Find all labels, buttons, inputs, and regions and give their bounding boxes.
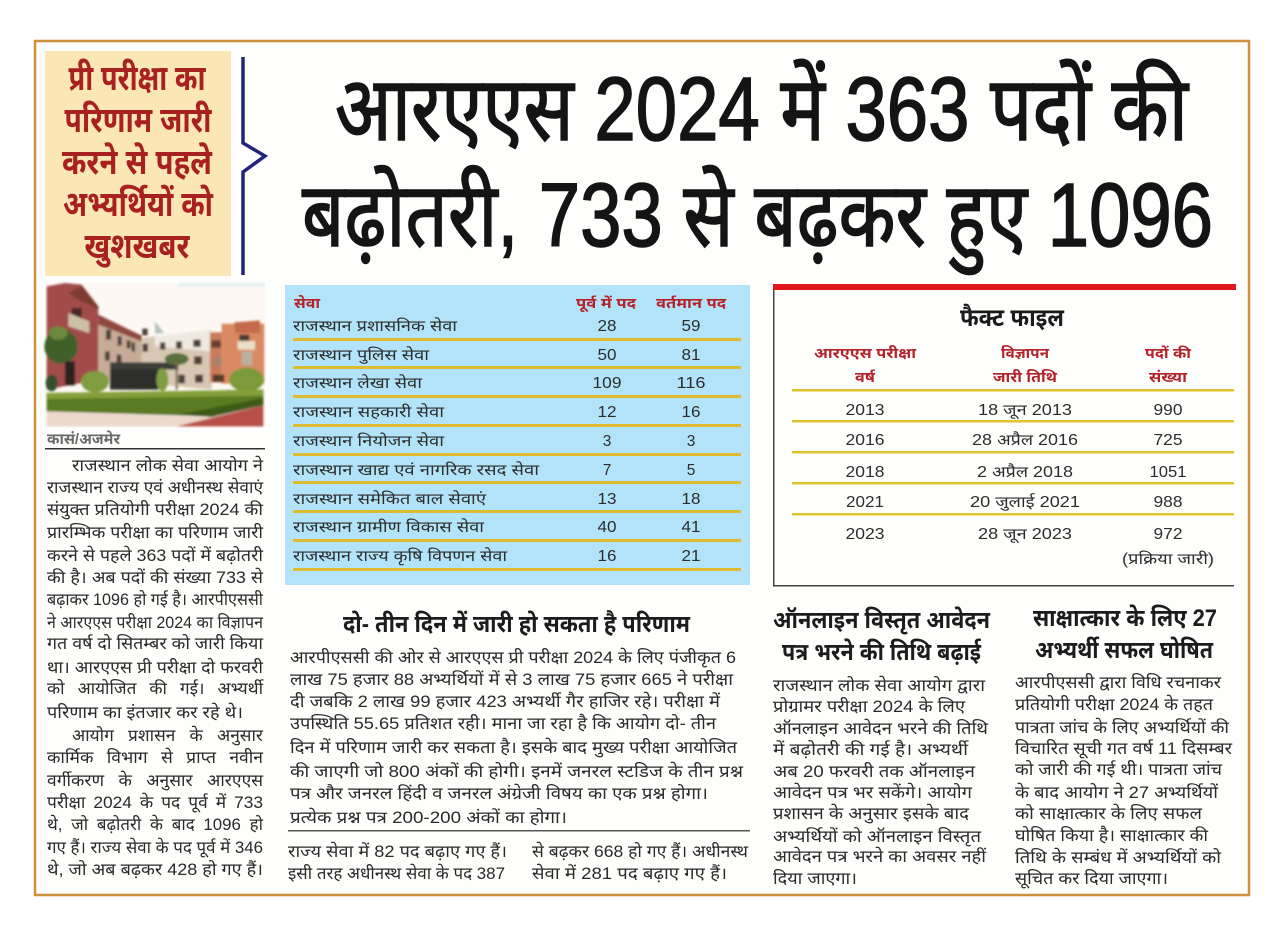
table rows: 40: [598, 519, 617, 536]
callout: pre exam tag: परिणाम जारी: [64, 100, 212, 140]
text block: centre article: लाख 75 हजार 88 अभ्यर्थियों में से 3 लाख 75 हजार 665 ने परीक्षा: [290, 670, 734, 689]
table rows: 81: [682, 347, 700, 364]
table header: सेवा: [294, 294, 321, 311]
text block: interview: को जारी की गई थी। पात्रता जांच: [1015, 760, 1223, 779]
table rows: 12: [598, 404, 616, 421]
table rows: 41: [682, 519, 700, 536]
table rows: 5: [687, 462, 695, 479]
table rows: 13: [598, 491, 616, 508]
text block: centre article: पत्र और जनरल हिंदी व जनरल अंग्रेजी विषय का एक प्रश्न होगा।: [290, 784, 708, 803]
text block: interview: के बाद आयोग ने 27 अभ्यर्थियों: [1015, 783, 1219, 802]
callout: pre exam tag: खुशखबर: [84, 227, 190, 268]
byline: कासं/अजमेर: [47, 430, 120, 448]
table rows: राजस्थान ग्रामीण विकास सेवा: [293, 517, 485, 536]
text block: left column: करने से पहले 363 पदों में बढ़ोतरी: [47, 546, 264, 565]
arrow: navy bracket: [243, 57, 265, 275]
fact file rows: 2021: [846, 494, 884, 511]
fact file rows: 20 जुलाई 2021: [970, 493, 1080, 512]
text block: left column: थे, जो बढ़ोतरी के बाद 1096 हो: [47, 815, 264, 834]
text block: left column: प्रारम्भिक परीक्षा का परिणाम जारी: [47, 524, 264, 542]
callout: pre exam tag: अभ्यर्थियों को: [63, 184, 214, 224]
table rows: [293, 316, 706, 566]
text block: left column: थे, जो अब बढ़कर 428 हो गए हैं।: [47, 860, 263, 879]
heading: online application: [773, 606, 991, 666]
fact file rows: 18 जून 2013: [978, 402, 1072, 420]
table rows: 18: [682, 491, 700, 508]
text block: online application: प्रशासन के अनुसार इसके बाद: [773, 804, 969, 824]
fact file rows: 2 अप्रैल 2018: [977, 462, 1073, 481]
text block: online application: में बढ़ोतरी की गई है। अभ्यर्थी: [773, 740, 969, 759]
text block: centre article footer: [288, 842, 748, 883]
fact file column headers: विज्ञापन: [1001, 345, 1049, 361]
fact file rows: 28 जून 2023: [978, 526, 1072, 544]
table rows: राजस्थान खाद्य एवं नागरिक रसद सेवा: [293, 460, 540, 479]
fact file column headers: जारी तिथि: [993, 369, 1058, 385]
text block: left column: बढ़ाकर 1096 हो गई है। आरपीएससी: [47, 590, 264, 609]
text block: online application: दिया जाएगा।: [773, 870, 857, 888]
text block: centre article: उपस्थिति 55.65 प्रतिशत रही। माना जा रहा है कि आयोग दो- तीन: [290, 714, 717, 733]
text block: centre article: की जाएगी जो 800 अंकों की होगी। इनमें जनरल स्टडिज के तीन प्रश्न: [290, 762, 743, 781]
text block: centre article: प्रत्येक प्रश्न पत्र 200-200 अंकों का होगा।: [290, 808, 567, 827]
text block: interview: [1015, 674, 1232, 889]
text block: interview: विचारित सूची गत वर्ष 11 दिसम्बर: [1015, 739, 1232, 759]
text block: interview: घोषित किया है। साक्षात्कार की: [1015, 826, 1209, 845]
fact file rows: 988: [1154, 494, 1182, 511]
text block: left column: [47, 456, 264, 879]
text block: centre article footer: सेवा में 281 पद बढ़ाए गए हैं।: [532, 864, 727, 883]
text block: centre article: आरपीएससी की ओर से आरएएस प्री परीक्षा 2024 के लिए पंजीकृत 6: [290, 648, 736, 668]
text block: centre article footer: राज्य सेवा में 82 पद बढ़ाए गए हैं।: [288, 842, 507, 861]
table header: वर्तमान पद: [656, 295, 727, 311]
table header: [294, 294, 727, 313]
table rows: राजस्थान राज्य कृषि विपणन सेवा: [293, 546, 508, 566]
fact file heading: फैक्ट फाइल: [960, 303, 1064, 332]
heading: online application: पत्र भरने की तिथि बढ़ाई: [782, 638, 982, 666]
text block: centre article footer: इसी तरह अधीनस्थ सेवा के पद 387: [288, 864, 505, 883]
text block: online application: [773, 676, 989, 888]
fact file rows: 28 अप्रैल 2016: [972, 430, 1078, 449]
text block: left column: राजस्थान लोक सेवा आयोग ने: [72, 456, 264, 475]
table header: पूर्व में पद: [576, 295, 637, 313]
text block: online application: अब 20 फरवरी तक ऑनलाइन: [773, 763, 976, 781]
heading: centre article: दो- तीन दिन में जारी हो सकता है परिणाम: [343, 610, 690, 638]
callout: pre exam tag: प्री परीक्षा का: [68, 58, 206, 98]
fact file column headers: आरएएस परीक्षा: [814, 345, 917, 361]
fact file rows: 2023: [846, 526, 884, 543]
text block: interview: प्रतियोगी परीक्षा 2024 के तहत: [1015, 695, 1214, 714]
fact file rows: 2013: [846, 402, 884, 419]
fact file rows: [846, 402, 1214, 568]
fact file rows: 1051: [1150, 464, 1186, 481]
text block: left column: राजस्थान राज्य एवं अधीनस्थ सेवाएं: [47, 478, 264, 497]
text block: left column: परिणाम का इंतजार कर रहे थे।: [47, 703, 243, 722]
title: [302, 59, 1213, 275]
table rows: 21: [682, 548, 700, 565]
text block: centre article: दी जबकि 2 लाख 99 हजार 423 अभ्यर्थी गैर हाजिर रहे। परीक्षा में: [290, 692, 721, 711]
text block: left column: की है। अब पदों की संख्या 733 से: [47, 568, 264, 587]
text block: centre article: दिन में परिणाम जारी कर सकता है। इसके बाद मुख्य परीक्षा आयोजित: [290, 738, 738, 758]
text block: left column: वर्गीकरण के अनुसार आरएएस: [47, 771, 264, 791]
table rows: राजस्थान समेकित बाल सेवाएं: [293, 489, 487, 508]
photo: commission building: [44, 283, 265, 427]
table rows: राजस्थान सहकारी सेवा: [293, 402, 445, 421]
table rows: 16: [682, 404, 700, 421]
text block: left column: ने आरएएस परीक्षा 2024 का विज्ञापन: [47, 613, 264, 632]
text block: left column: कार्मिक विभाग से प्राप्त नवीन: [47, 748, 264, 767]
text block: online application: प्रोग्रामर परीक्षा 2024 के लिए: [773, 697, 966, 716]
table rows: 3: [603, 433, 611, 450]
panel: services table: [285, 285, 750, 585]
table rows: राजस्थान लेखा सेवा: [293, 373, 423, 392]
callout: pre exam tag: [45, 51, 231, 276]
text block: interview: को साक्षात्कार के लिए सफल: [1015, 804, 1203, 823]
fact file rows: 2016: [846, 432, 884, 449]
text block: left column: को आयोजित की गई। अभ्यर्थी: [47, 679, 264, 698]
text block: interview: आरपीएससी द्वारा विधि रचनाकर: [1015, 674, 1221, 692]
text block: left column: आयोग प्रशासन के अनुसार: [72, 726, 263, 746]
text block: left column: संयुक्त प्रतियोगी परीक्षा 2024 की: [47, 500, 264, 520]
text block: centre article footer: से बढ़कर 668 हो गए हैं। अधीनस्थ: [532, 842, 748, 861]
table rows: 109: [592, 375, 622, 392]
heading: online application: ऑनलाइन विस्तृत आवेदन: [773, 606, 991, 635]
fact file column headers: पदों की: [1145, 345, 1192, 361]
text block: online application: आवेदन पत्र भर सकेंगे। आयोग: [773, 783, 973, 802]
heading: interview: अभ्यर्थी सफल घोषित: [1035, 636, 1214, 664]
text block: interview: पात्रता जांच के लिए अभ्यर्थियों की: [1015, 718, 1230, 737]
table rows: राजस्थान प्रशासनिक सेवा: [293, 316, 458, 335]
fact file rows: 2018: [846, 464, 884, 481]
fact file column headers: [814, 345, 1192, 385]
table rows: 3: [687, 433, 695, 450]
text block: online application: राजस्थान लोक सेवा आयोग द्वारा: [773, 676, 986, 695]
table rows: 7: [603, 462, 611, 479]
heading: interview: साक्षात्कार के लिए 27: [1033, 604, 1217, 632]
heading: interview: [1033, 604, 1217, 664]
callout: pre exam tag: करने से पहले: [62, 142, 213, 182]
table rows: 50: [598, 347, 617, 364]
text block: left column: परीक्षा 2024 के पद पूर्व में 733: [47, 793, 263, 813]
fact file rows: 972: [1154, 526, 1182, 543]
text block: left column: गए हैं। राज्य सेवा के पद पूर्व में 346: [47, 838, 263, 858]
fact file column headers: वर्ष: [855, 369, 876, 385]
table rows: राजस्थान नियोजन सेवा: [293, 431, 445, 450]
text block: left column: था। आरएएस प्री परीक्षा दो फरवरी: [47, 659, 264, 677]
text block: interview: तिथि के सम्बंध में अभ्यर्थियों को: [1015, 848, 1222, 867]
table rows: राजस्थान पुलिस सेवा: [293, 345, 430, 365]
table rows: 28: [598, 318, 616, 335]
fact file rows: 990: [1154, 402, 1183, 419]
fact file rows: 725: [1154, 432, 1182, 449]
text block: online application: अभ्यर्थियों को ऑनलाइन विस्तृत: [773, 827, 982, 847]
text block: interview: सूचित कर दिया जाएगा।: [1015, 870, 1168, 889]
text block: centre article: [290, 648, 743, 827]
table rows: 59: [682, 318, 700, 335]
fact file rows: (प्रक्रिया जारी): [1122, 550, 1214, 568]
fact file column headers: संख्या: [1149, 369, 1188, 385]
panel: fact file: [773, 284, 1236, 586]
text block: online application: ऑनलाइन आवेदन भरने की तिथि: [773, 719, 989, 738]
table rows: 16: [598, 548, 616, 565]
table rows: 116: [676, 375, 706, 392]
text block: online application: आवेदन पत्र भरने का अवसर नहीं: [773, 847, 987, 866]
text block: left column: गत वर्ष दो सितम्बर को जारी किया: [47, 634, 264, 653]
